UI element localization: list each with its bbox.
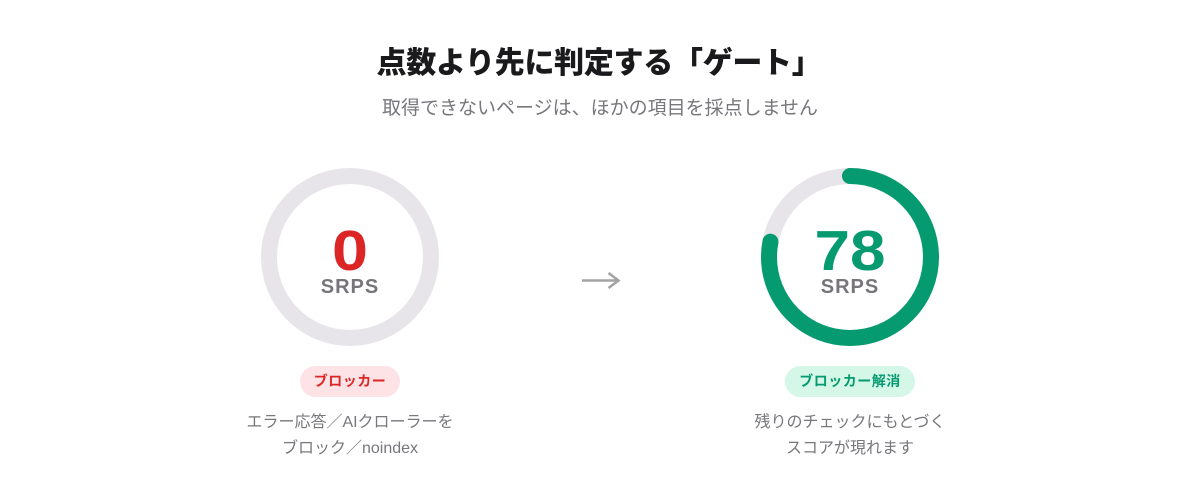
badge: blocker: ブロッカー <box>314 373 386 389</box>
description: blocker <box>246 413 454 457</box>
gauge: after score 78: SRPS <box>821 276 879 298</box>
description: cleared: スコアが現れます <box>786 440 914 457</box>
arrow <box>582 272 620 289</box>
badge: blocker cleared <box>785 366 915 397</box>
gauge: before score 0: SRPS <box>321 276 379 298</box>
gauge: after score 78: 78 <box>814 219 886 283</box>
description: blocker: ブロック／noindex <box>282 440 418 457</box>
description: blocker: エラー応答／AIクローラーを <box>246 414 454 431</box>
description: cleared: 残りのチェックにもとづく <box>754 414 946 431</box>
badge: blocker <box>300 366 400 397</box>
gauge: before score 0: 0 <box>332 219 368 283</box>
subtitle: 取得できないページは、ほかの項目を採点しません <box>382 98 818 119</box>
gauge: before score 0 <box>261 168 439 346</box>
gauge: after score 78 <box>761 168 939 346</box>
title: 点数より先に判定する「ゲート」 <box>377 47 821 80</box>
description: cleared <box>754 413 946 457</box>
badge: blocker cleared: ブロッカー解消 <box>799 373 901 389</box>
